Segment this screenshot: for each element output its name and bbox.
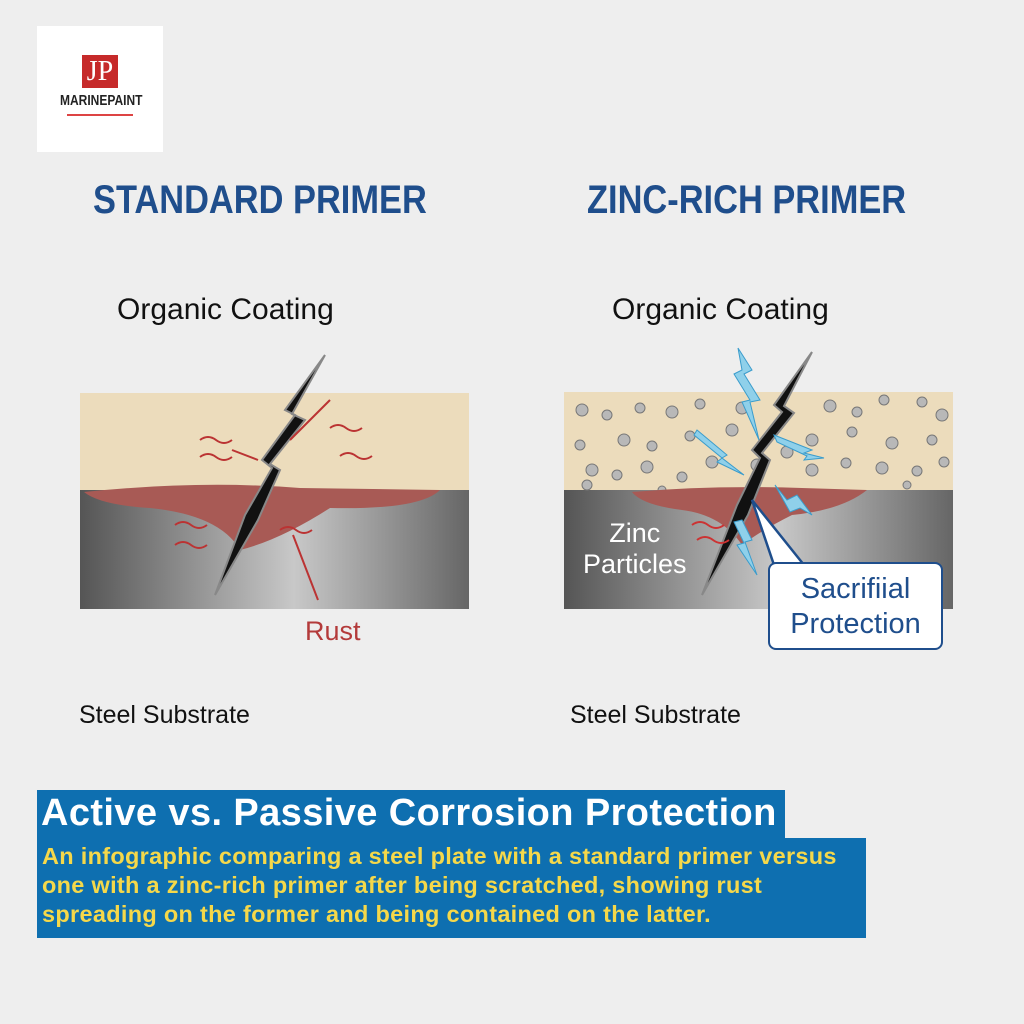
heading: zinc-rich primer: ZINC-RICH PRIMER	[587, 178, 906, 222]
banner title: Active vs. Passive Corrosion Protection	[41, 792, 777, 834]
label: steel substrate right: Steel Substrate	[570, 701, 741, 729]
diagram: zinc-rich primer	[564, 348, 953, 609]
zinc particles	[575, 395, 949, 494]
heading: standard primer: STANDARD PRIMER	[93, 178, 427, 222]
banner description: An infographic comparing a steel plate with a standard primer versus	[42, 843, 837, 869]
lightning bolts	[694, 348, 824, 575]
crack	[702, 352, 812, 595]
rust layer	[84, 485, 440, 550]
callout: sacrificial protection: Protection	[790, 608, 921, 640]
arrows	[175, 400, 372, 600]
banner description	[37, 838, 866, 938]
crack	[215, 355, 325, 595]
label: zinc particles	[583, 518, 687, 579]
label: steel substrate left: Steel Substrate	[79, 701, 250, 729]
logo mark	[82, 55, 118, 88]
logo	[37, 26, 163, 152]
label: zinc particles: Zinc	[609, 518, 660, 548]
banner description: one with a zinc-rich primer after being scratched, showing rust	[42, 872, 762, 898]
wavy lines	[692, 522, 729, 543]
label: organic coating left: Organic Coating	[117, 293, 334, 326]
label: zinc particles: Particles	[583, 549, 687, 579]
banner description: spreading on the former and being contained on the latter.	[42, 901, 711, 927]
logo mark: JP	[87, 56, 113, 87]
rust layer	[632, 487, 867, 545]
label: rust: Rust	[305, 616, 361, 646]
callout: sacrificial protection	[768, 562, 943, 650]
callout: sacrificial protection: Sacrifiial	[801, 573, 910, 605]
diagram: standard primer	[80, 354, 469, 609]
label: organic coating right: Organic Coating	[612, 293, 829, 326]
callout pointer	[752, 500, 804, 565]
logo text: MARINEPAINT	[60, 92, 142, 109]
